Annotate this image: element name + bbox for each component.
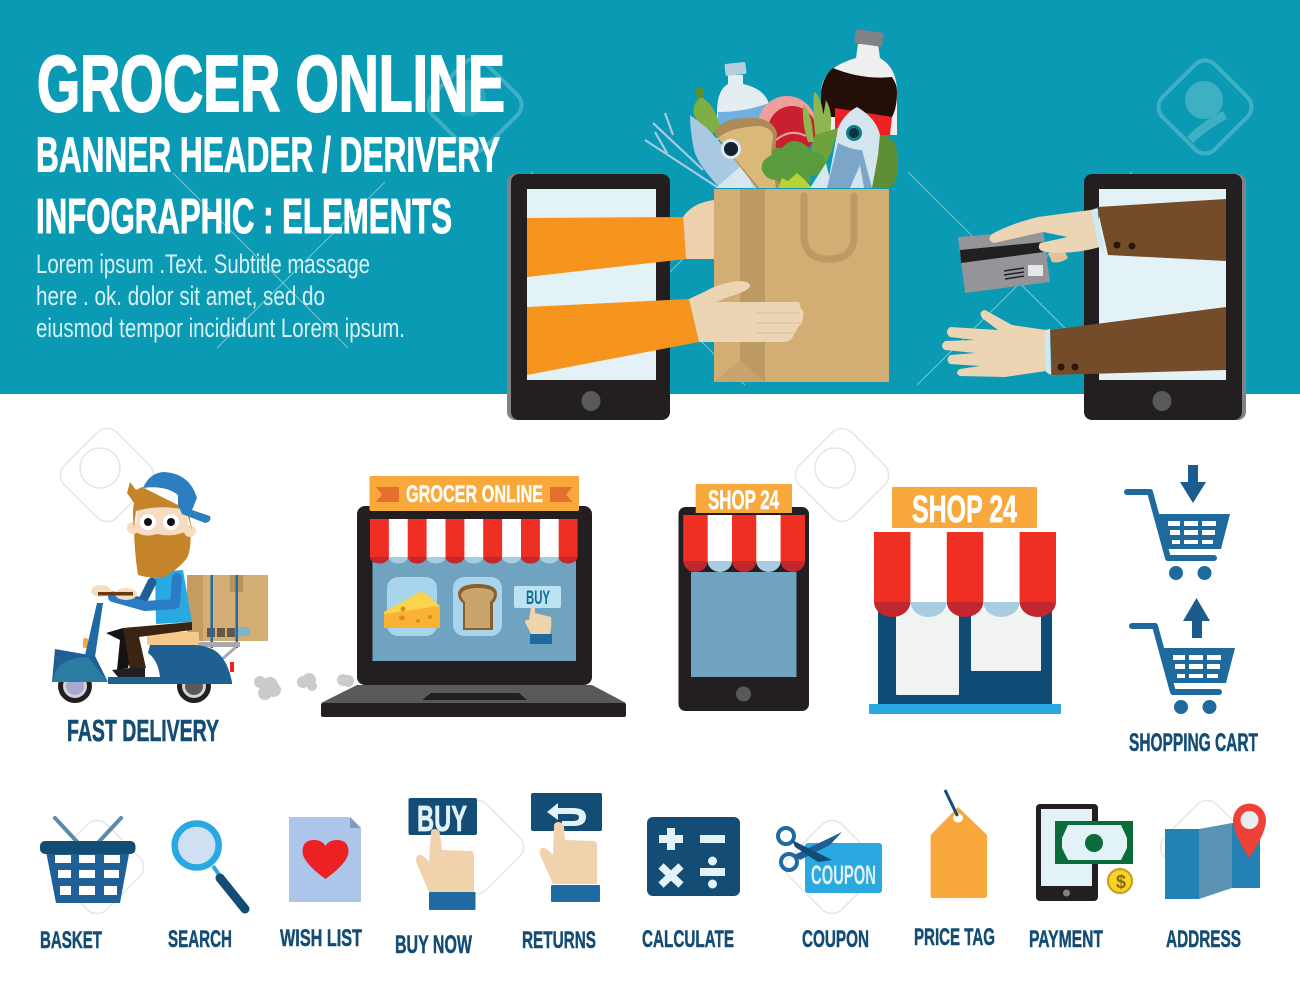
lettuce <box>762 141 826 182</box>
main title: GROCER ONLINE <box>37 39 505 128</box>
tablet awning <box>683 515 805 572</box>
icon: calculator <box>647 817 740 896</box>
soda bottle <box>821 29 897 135</box>
chard leaf <box>872 135 898 188</box>
scooter body <box>52 603 234 684</box>
orange sign: GROCER ONLINE <box>406 481 543 508</box>
label: buy now: BUY NOW <box>395 931 472 959</box>
brown upper sleeve <box>1097 199 1226 261</box>
body copy: eiusmod tempor incididunt Lorem ipsum. <box>36 313 405 343</box>
cheese card <box>384 577 440 636</box>
package box <box>187 575 268 648</box>
down arrow <box>1180 465 1206 503</box>
physical shop building <box>869 487 1061 714</box>
rider hands on handlebar <box>91 585 137 600</box>
label: address: ADDRESS <box>1166 926 1241 953</box>
laptop storefront <box>321 476 626 717</box>
right fish <box>810 107 880 188</box>
icon: buy now <box>408 798 477 910</box>
icon: returns <box>531 793 602 902</box>
up arrow <box>1183 598 1210 638</box>
label: fast delivery: FAST DELIVERY <box>67 713 219 748</box>
face <box>136 505 189 536</box>
delivery rider on scooter <box>52 472 268 703</box>
label: price tag: PRICE TAG <box>914 924 995 951</box>
label: payment: PAYMENT <box>1029 926 1103 953</box>
exhaust smoke puffs <box>254 656 404 700</box>
cart: remove from cart <box>1132 598 1235 714</box>
label: wish list: WISH LIST <box>280 925 362 952</box>
laptop awning <box>370 519 578 564</box>
tablet shop sign: SHOP 24 <box>708 485 779 515</box>
green sprigs <box>778 173 812 188</box>
bread card <box>453 577 502 636</box>
ears <box>127 522 196 537</box>
label: coupon: COUPON <box>802 926 869 953</box>
hair <box>127 482 192 530</box>
paper bag <box>714 189 889 382</box>
rider torso <box>155 570 192 624</box>
subtitle line two: INFOGRAPHIC : ELEMENTS <box>36 190 452 244</box>
eyes <box>140 514 179 530</box>
brown lower sleeve <box>1050 307 1226 375</box>
seat <box>147 632 199 645</box>
icon: coupon: COUPON <box>811 860 876 890</box>
label: search: SEARCH <box>168 926 232 953</box>
title block <box>36 39 505 343</box>
right phone with buyer arms <box>1050 174 1246 420</box>
label: calculate: CALCULATE <box>642 926 734 953</box>
header banner background <box>0 0 1300 394</box>
beard <box>134 525 191 578</box>
orange sign <box>370 476 579 511</box>
icon: buy now: BUY <box>417 798 467 839</box>
label: returns: RETURNS <box>522 927 596 954</box>
label: basket: BASKET <box>40 927 102 954</box>
shop awning <box>874 532 1056 617</box>
hand holding bag <box>689 281 804 342</box>
credit card <box>958 230 1050 293</box>
icon: search <box>175 824 245 909</box>
icon: wish list <box>289 817 361 902</box>
shop sign: SHOP 24 <box>912 489 1017 531</box>
fish eye left <box>721 139 741 159</box>
icon: payment: $ <box>1116 872 1126 892</box>
hand behind bag <box>683 200 714 259</box>
tablet storefront <box>678 484 809 711</box>
body copy <box>36 249 405 343</box>
bread slice <box>715 118 780 188</box>
shop sign <box>892 487 1037 531</box>
orange lower sleeve <box>527 299 699 375</box>
hand holding card <box>989 208 1105 262</box>
body copy: Lorem ipsum .Text. Subtitle massage <box>36 249 370 279</box>
water bottle <box>717 62 770 140</box>
left phone with seller arms <box>507 174 714 420</box>
left fish <box>645 113 760 188</box>
tablet shop sign <box>696 484 792 515</box>
meat <box>758 96 816 154</box>
groceries in bag <box>645 29 898 188</box>
laptop base <box>321 685 626 717</box>
cart: add to cart <box>1127 465 1230 580</box>
buy button with hand: BUY <box>526 588 550 609</box>
rear wheel <box>177 669 211 703</box>
icon: payment <box>1036 804 1133 901</box>
green stems <box>808 128 838 165</box>
body copy: here . ok. dolor sit amet, sed do <box>36 281 325 311</box>
rack <box>197 642 240 661</box>
rider arms <box>113 578 177 606</box>
buy button with hand <box>514 586 561 644</box>
icon: price tag <box>931 790 987 898</box>
cucumber <box>694 88 720 137</box>
icon: basket <box>40 818 136 903</box>
icon: coupon <box>778 828 882 893</box>
subtitle line one: BANNER HEADER / DERIVERY <box>36 128 500 182</box>
cap <box>143 472 210 523</box>
asparagus <box>803 92 831 142</box>
icon: address map <box>1165 804 1266 899</box>
open receiving hand <box>942 310 1051 377</box>
rider trousers <box>106 622 192 677</box>
orange upper sleeve <box>527 217 686 277</box>
front wheel <box>58 669 92 703</box>
